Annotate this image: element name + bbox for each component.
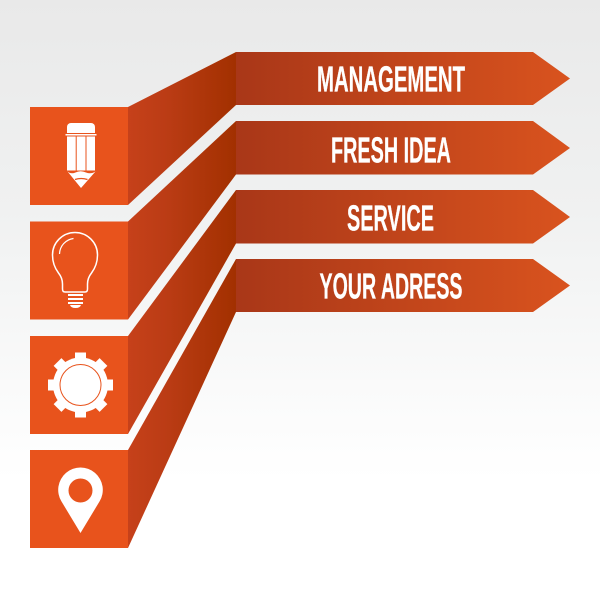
square tile 2 xyxy=(30,222,128,320)
label: management: MANAGEMENT xyxy=(317,58,465,100)
label: fresh idea: FRESH IDEA xyxy=(331,130,451,170)
arrow banner 1 xyxy=(236,52,570,105)
step 1: management xyxy=(30,52,570,205)
step 2: fresh idea xyxy=(30,121,570,320)
label: service: SERVICE xyxy=(347,198,434,238)
arrow banner 4 xyxy=(236,259,570,312)
fold 1 xyxy=(128,52,236,205)
label: your adress: YOUR ADRESS xyxy=(320,266,462,306)
fold 3 xyxy=(128,190,236,434)
fold 2 xyxy=(128,121,236,320)
icon: pencil xyxy=(66,123,96,188)
arrow banner 2 xyxy=(236,121,570,174)
step 3: service xyxy=(30,190,570,434)
square tile 3 xyxy=(30,336,128,434)
arrow banner 3 xyxy=(236,190,570,244)
fold 4 xyxy=(128,259,236,548)
icon: light bulb xyxy=(52,233,98,308)
icon: gear xyxy=(48,352,113,418)
square tile 1 xyxy=(30,107,128,205)
icon: map pin xyxy=(58,468,103,533)
square tile 4 xyxy=(30,450,128,548)
step 4: your adress xyxy=(30,259,570,548)
